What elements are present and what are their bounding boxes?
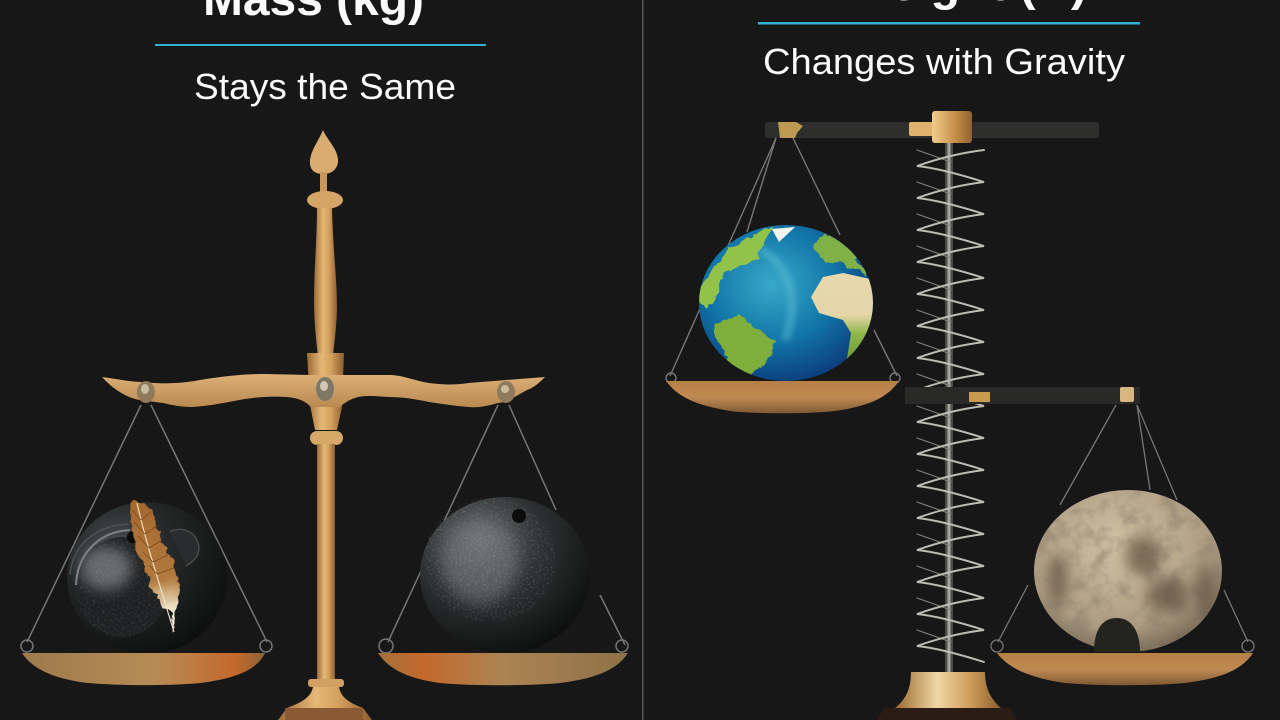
africa (811, 273, 873, 358)
chains: moon pan (991, 405, 1254, 652)
subtitle: changes with gravity: Changes with Gravity (763, 41, 1125, 82)
central rod (945, 143, 953, 673)
chains: earth pan (666, 138, 900, 383)
lunar maria (1048, 535, 1214, 618)
iron ball with feather (67, 500, 227, 654)
top arm clamp (778, 122, 803, 138)
right pan (378, 653, 628, 685)
europe (815, 233, 867, 277)
spring scale (666, 111, 1254, 720)
top arm (765, 122, 1099, 138)
panel: weight (666, 0, 1254, 720)
polar ice (772, 227, 795, 242)
ocean swirl (760, 250, 792, 340)
earth (695, 225, 878, 384)
heading rule: mass (155, 44, 486, 46)
feather (129, 500, 181, 632)
earth pan (666, 381, 899, 413)
centre divider (642, 0, 644, 720)
subtitle: stays the same: Stays the Same (194, 66, 456, 107)
moon (1034, 490, 1222, 652)
beam pivots (137, 377, 515, 403)
balance stand (278, 130, 372, 720)
panel: mass (21, 0, 628, 720)
lower arm (905, 387, 1140, 404)
lower arm fittings (969, 387, 1134, 402)
balance beam (102, 374, 545, 407)
small dark ball (1094, 618, 1140, 652)
balance scale (21, 130, 628, 720)
south america (716, 315, 775, 384)
north america (695, 226, 772, 307)
spring scale base (877, 672, 1017, 720)
central gold block (909, 111, 972, 143)
left pan (22, 653, 265, 685)
moon pan (997, 653, 1253, 685)
coil spring (917, 150, 984, 662)
chains (21, 405, 628, 653)
iron ball (420, 497, 590, 653)
inner ball shape (75, 537, 169, 637)
heading rule: weight (758, 22, 1140, 24)
